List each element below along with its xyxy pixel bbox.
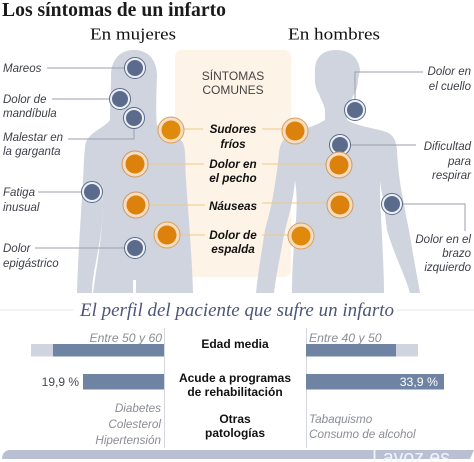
heading: sintomas comunes: SÍNTOMAS: [202, 68, 264, 83]
labels: women symptoms: Malestar en: [3, 132, 63, 144]
bar: rehabilitacion hombres: [306, 374, 444, 390]
heading: en hombres: En hombres: [288, 24, 380, 44]
labels: women symptoms: [3, 63, 63, 270]
labels: women symptoms: Fatiga: [3, 187, 35, 199]
labels: common symptoms: Dolor de: [209, 229, 257, 242]
bar: edad media hombres: [306, 331, 418, 356]
labels: women symptoms: mandíbula: [3, 108, 57, 120]
heading: en mujeres: En mujeres: [90, 24, 176, 44]
labels: common symptoms: Sudores: [210, 123, 257, 136]
center labels: de rehabilitación: [187, 385, 283, 399]
center axis lines: [164, 328, 306, 448]
center labels: [179, 337, 291, 440]
marker: nauseas hombre: [327, 192, 353, 218]
list: pathologies women: Diabetes: [115, 402, 161, 415]
bar: rehabilitacion mujeres: 19,9 %: [42, 375, 79, 389]
marker: mandibula: [110, 88, 130, 110]
labels: men symptoms: Dolor en el: [415, 234, 471, 246]
marker: epigastrico: [124, 238, 146, 258]
marker: espalda hombre: [288, 223, 314, 249]
bar: rehabilitacion mujeres: [42, 374, 164, 390]
marker: sudores mujer: [158, 117, 184, 143]
labels: men symptoms: izquierdo: [424, 262, 472, 274]
center labels: Edad media: [201, 337, 269, 351]
bar: edad media hombres: Entre 40 y 50: [309, 331, 382, 345]
list: pathologies men: [309, 413, 416, 441]
labels: men symptoms: para: [447, 156, 471, 168]
labels: women symptoms: epigástrico: [3, 258, 59, 270]
panel: common symptoms background: [175, 50, 291, 277]
labels: women symptoms: Mareos: [3, 63, 42, 75]
bar: edad media mujeres: Entre 50 y 60: [90, 331, 162, 345]
labels: men symptoms: [415, 66, 472, 274]
labels: women symptoms: inusual: [3, 202, 40, 214]
marker: sudores hombre: [282, 118, 308, 144]
labels: men symptoms: respirar: [432, 170, 472, 182]
center labels: patologías: [205, 426, 265, 440]
marker: fatiga: [82, 182, 102, 202]
labels: men symptoms: Dificultad: [424, 141, 472, 153]
labels: common symptoms: espalda: [211, 243, 255, 256]
connector lines: amber: [146, 129, 329, 235]
figure: man silhouette: [256, 50, 420, 293]
list: pathologies women: Colesterol: [108, 418, 161, 431]
labels: common symptoms: Náuseas: [209, 200, 258, 213]
labels: common symptoms: [209, 123, 258, 256]
marker: espalda mujer: [154, 222, 180, 248]
labels: men symptoms: el cuello: [429, 81, 472, 93]
list: pathologies men: Consumo de alcohol: [309, 428, 416, 441]
marker: cuello: [344, 100, 366, 120]
labels: men symptoms: Dolor en: [428, 66, 471, 78]
heading: sintomas comunes: COMUNES: [202, 83, 264, 97]
marker: respirar: [330, 134, 350, 156]
labels: women symptoms: Dolor de: [3, 94, 46, 106]
labels: women symptoms: Dolor: [3, 243, 32, 255]
list: pathologies women: [95, 402, 161, 447]
heading: sintomas comunes: [202, 68, 264, 97]
connector lines: gray: [35, 68, 465, 248]
marker: garganta: [124, 108, 144, 128]
labels: common symptoms: Dolor en: [209, 158, 257, 171]
center labels: Otras: [219, 412, 251, 426]
title: Los síntomas de un infarto: [2, 0, 226, 21]
labels: common symptoms: fríos: [220, 138, 246, 151]
marker: pecho mujer: [122, 151, 148, 177]
center labels: Acude a programas: [179, 371, 291, 385]
marker: mareos: [124, 58, 146, 78]
bar: rehabilitacion hombres: 33,9 %: [400, 375, 438, 389]
marker: pecho hombre: [326, 152, 352, 178]
figure: woman silhouette: [77, 50, 193, 293]
footer bar with logo: [2, 447, 474, 462]
labels: men symptoms: brazo: [442, 248, 472, 260]
marker: nauseas mujer: [123, 192, 149, 218]
list: pathologies men: Tabaquismo: [309, 413, 373, 426]
labels: common symptoms: el pecho: [209, 172, 257, 185]
marker: brazo: [382, 194, 402, 214]
list: pathologies women: Hipertensión: [95, 434, 161, 447]
bar: edad media mujeres: [31, 331, 164, 356]
labels: women symptoms: la garganta: [3, 146, 61, 158]
section heading: perfil del paciente: El perfil del paciente que sufre un infarto: [79, 301, 394, 321]
